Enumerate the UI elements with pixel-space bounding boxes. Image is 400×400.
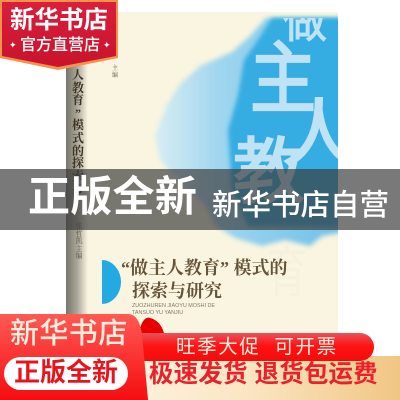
spine text: 育 bbox=[72, 93, 84, 107]
pinyin: ZUOZHUREN JIAOYU MOSHI DE bbox=[132, 303, 215, 309]
badge star left: ✦ bbox=[9, 40, 17, 50]
spine bbox=[66, 12, 88, 356]
red promo pill bbox=[140, 333, 374, 361]
badge star right: ✦ bbox=[103, 40, 111, 50]
cover editor bbox=[112, 64, 118, 78]
cover editor: 编 bbox=[112, 72, 118, 78]
cover editor: 主 bbox=[112, 66, 118, 72]
panel title: 新华书店 bbox=[10, 318, 128, 350]
vertical cover title: 做主人教育: 育 bbox=[267, 243, 307, 305]
half-circle mark bbox=[102, 260, 121, 304]
promo text: 旺季大促 可开票 bbox=[176, 336, 338, 358]
bottom cream strip bbox=[140, 356, 400, 400]
badge title: 新华书店 bbox=[10, 7, 108, 34]
spine text: 的 bbox=[72, 144, 84, 158]
spine editor: 凯 bbox=[76, 237, 82, 245]
grey banner bbox=[0, 169, 400, 230]
watercolor wash bbox=[155, 18, 345, 246]
spine text: 索 bbox=[72, 169, 84, 183]
shipping text: 极速发货 退货包运费 bbox=[149, 361, 378, 388]
pill text: 正版全新 bbox=[14, 357, 118, 387]
badge subtitle: 官方直营店 bbox=[20, 37, 100, 54]
vertical cover title: 做主人教育: 主 bbox=[250, 35, 316, 123]
book title: 探索与研究 bbox=[132, 281, 222, 301]
spine text: 式 bbox=[72, 131, 84, 145]
spine text: 人 bbox=[72, 68, 84, 82]
book cover bbox=[66, 12, 338, 333]
spine text: 与 bbox=[72, 181, 84, 195]
spine editor: 编 bbox=[76, 252, 82, 260]
vertical cover title: 做主人教育 bbox=[233, 18, 338, 305]
banner headline: 正版全新 bbox=[28, 173, 197, 220]
spine text: 探 bbox=[72, 156, 84, 170]
spine editor bbox=[76, 222, 82, 260]
pinyin: TANSUO YU YANJIU bbox=[132, 310, 183, 316]
bottom-left red panel bbox=[0, 314, 164, 400]
spine text: ” bbox=[75, 106, 81, 120]
top-left red badge bbox=[0, 0, 118, 70]
book title: “做主人教育” 模式的 bbox=[121, 258, 288, 278]
pinyin bbox=[132, 303, 215, 316]
spine text: 教 bbox=[72, 81, 84, 95]
spine text bbox=[72, 68, 84, 195]
spine editor: 张 bbox=[76, 222, 82, 230]
white pill bbox=[4, 357, 128, 390]
vertical cover title: 做主人教育: 教 bbox=[233, 133, 305, 213]
spine editor: 哲 bbox=[76, 230, 82, 238]
spine editor: 主 bbox=[76, 245, 82, 253]
spine text: 模 bbox=[72, 118, 84, 132]
banner sub-headline: 新华书店自营 bbox=[212, 189, 389, 222]
book title bbox=[121, 258, 288, 301]
